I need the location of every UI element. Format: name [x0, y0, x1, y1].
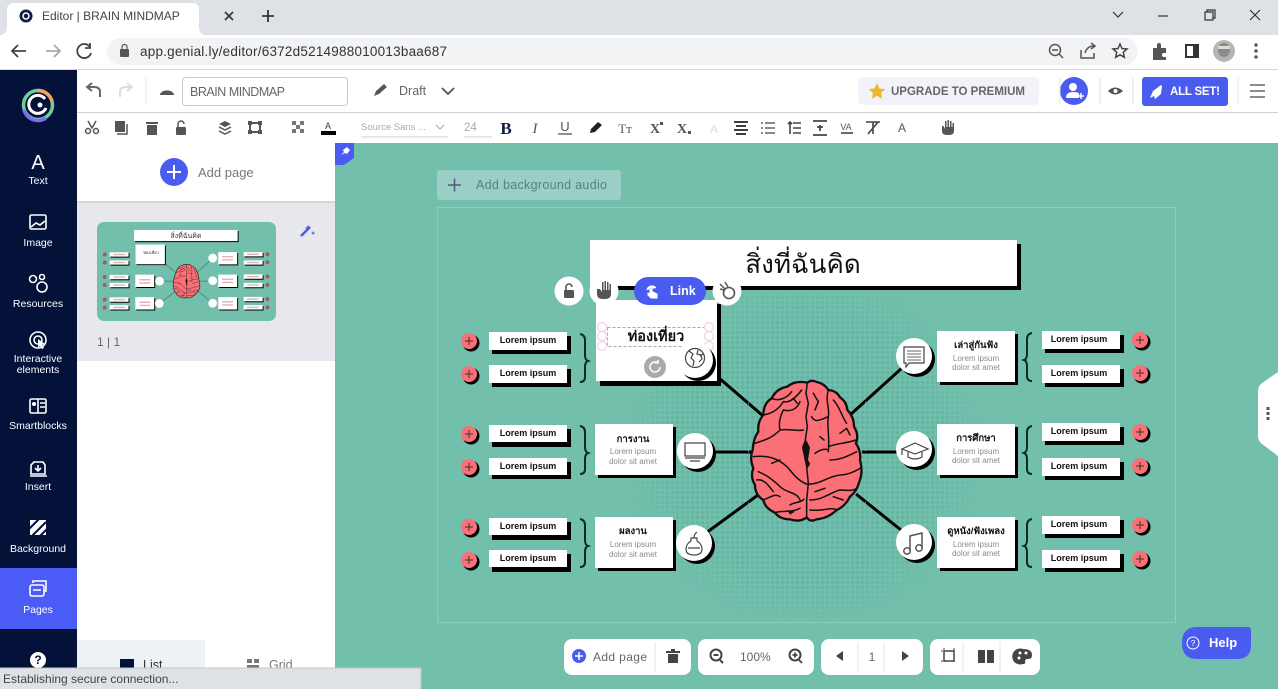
opacity icon — [292, 121, 304, 133]
lock button — [554, 276, 584, 306]
magic wand icon — [301, 225, 315, 236]
icon: speech bubble — [896, 338, 935, 377]
formatting toolbar — [77, 113, 1278, 143]
new tab button — [262, 10, 274, 22]
card: achievements: ผลงาน — [619, 526, 647, 537]
sidebar item: interactive elements: elements — [17, 364, 59, 376]
label box: Lorem ipsum — [1051, 519, 1107, 529]
label box: Lorem ipsum — [1051, 426, 1107, 436]
thumbnail of mind map: ท่องเที่ยว — [143, 250, 159, 255]
font size — [464, 122, 492, 137]
card: movies and music — [937, 517, 1018, 571]
zoom controls group: 100% — [740, 650, 771, 664]
right row 1 items — [1024, 331, 1150, 387]
sidebar item: interactive elements: Interactive — [14, 353, 62, 365]
font size: 24 — [464, 122, 477, 134]
card: work — [595, 424, 676, 478]
help icon: ? — [34, 653, 42, 667]
font selector: Source Sans ... — [361, 122, 426, 133]
title banner: สิ่งที่ฉันคิด — [745, 246, 861, 279]
pin tab — [335, 143, 354, 165]
sidebar item: text: A — [31, 152, 45, 174]
text style icons: U — [560, 119, 570, 134]
sidebar item: text — [28, 152, 48, 187]
right row 2 items — [1024, 423, 1150, 480]
text style icons: Tт — [618, 121, 632, 136]
help button: ? — [1191, 639, 1196, 648]
url field — [107, 38, 1138, 65]
bracket — [1024, 426, 1032, 474]
text colour icon — [321, 121, 336, 135]
text colour icon: A — [325, 121, 331, 131]
zoom controls group — [698, 639, 814, 675]
bracket — [580, 426, 588, 474]
link pill button: Link — [670, 284, 696, 298]
card: storytelling: Lorem ipsum — [953, 354, 999, 363]
plus button — [461, 426, 480, 444]
label box: Lorem ipsum — [500, 368, 556, 378]
menu icon — [1250, 85, 1265, 97]
add page row: Add page — [198, 165, 254, 180]
preview eye — [1108, 88, 1123, 94]
page navigation group — [821, 639, 923, 675]
formatting toolbar: VA — [840, 122, 852, 132]
plus button — [1132, 365, 1150, 384]
rotate handle — [644, 356, 666, 378]
editor header toolbar — [0, 70, 1278, 113]
icon: globe — [677, 342, 716, 381]
sidebar item: smartblocks: Smartblocks — [9, 420, 67, 432]
sidebar item: background — [10, 518, 66, 555]
add collaborator button — [1060, 77, 1088, 105]
bottom toolbar — [564, 639, 1040, 675]
brain illustration — [748, 378, 866, 524]
card: storytelling: เล่าสู่กันฟัง — [954, 339, 998, 352]
card: work: dolor sit amet — [609, 457, 658, 466]
magnet button — [712, 276, 742, 306]
page navigation group: 1 — [869, 650, 876, 664]
floating selection toolbar — [554, 276, 742, 306]
sidebar item: image: Image — [23, 237, 53, 249]
text style icons: X — [677, 122, 687, 137]
sidebar item: background: Background — [10, 543, 66, 555]
halftone background — [656, 301, 954, 599]
sidebar item: interactive elements — [14, 332, 62, 376]
view tools group — [930, 639, 1040, 675]
formatting toolbar: A — [898, 121, 906, 135]
hand tool icon — [942, 120, 954, 135]
bracket — [580, 519, 588, 567]
browser status bar: Establishing secure connection... — [3, 672, 178, 686]
card: movies and music: Lorem ipsum — [953, 540, 999, 549]
label box: Lorem ipsum — [500, 335, 556, 345]
active tab: Editor | BRAIN MINDMAP — [42, 9, 180, 23]
bracket — [1024, 333, 1032, 381]
draft status — [374, 84, 454, 98]
sidebar item: smartblocks — [9, 399, 67, 432]
page number: 1 | 1 — [97, 335, 120, 349]
browser status bar — [0, 668, 421, 689]
card: achievements: Lorem ipsum — [610, 540, 656, 549]
left row 3 items — [461, 518, 588, 572]
label box: Lorem ipsum — [500, 428, 556, 438]
plus button — [461, 333, 480, 352]
layer and group icons — [219, 121, 262, 134]
bracket — [580, 334, 588, 382]
list and grid tabs: Grid — [269, 658, 293, 672]
hand button — [590, 276, 618, 306]
card: storytelling: dolor sit amet — [952, 363, 1001, 372]
icon: music note — [896, 524, 935, 563]
label box: Lorem ipsum — [1051, 368, 1107, 378]
selected card: travel — [596, 300, 721, 386]
plus button — [1132, 424, 1150, 442]
text style icons — [500, 119, 718, 138]
card: work: Lorem ipsum — [610, 447, 656, 456]
icon: graduation cap — [896, 431, 935, 470]
sidebar item: pages active: Pages — [23, 604, 53, 616]
upgrade to premium button — [858, 77, 1039, 105]
add background audio button: Add background audio — [476, 178, 607, 192]
canvas page frame — [438, 208, 1176, 622]
text style icons: B — [500, 119, 512, 138]
right row 3 items — [1024, 516, 1150, 572]
add page row — [160, 158, 254, 186]
edit tool icons — [86, 121, 186, 135]
plus button — [461, 459, 480, 478]
bracket — [1024, 519, 1032, 567]
help button — [1182, 627, 1251, 659]
card: work: การงาน — [617, 434, 650, 445]
card: storytelling — [937, 331, 1018, 385]
sidebar item: text: Text — [28, 175, 48, 187]
left sidebar — [0, 70, 77, 689]
browser menu — [1254, 43, 1258, 59]
help icon — [30, 652, 46, 668]
upgrade to premium button: UPGRADE TO PREMIUM — [891, 86, 1025, 98]
browser address bar — [0, 35, 1278, 70]
sidebar item: insert — [25, 462, 51, 493]
text selection box: ท่องเที่ยว — [628, 325, 684, 345]
font selector — [361, 122, 448, 137]
plus button — [1132, 551, 1150, 570]
genially logo — [24, 90, 52, 120]
card: education — [937, 424, 1018, 478]
card: movies and music: ดูหนัง/ฟังเพลง — [947, 525, 1005, 538]
pages panel — [77, 143, 335, 689]
plus button — [461, 366, 480, 384]
card: achievements — [595, 517, 676, 571]
connector lines — [706, 368, 902, 533]
card: achievements: dolor sit amet — [609, 550, 658, 559]
profile avatar — [1213, 40, 1235, 62]
text style icons: I — [532, 121, 538, 137]
label box: Lorem ipsum — [500, 461, 556, 471]
page controls group: Add page — [593, 650, 647, 664]
label box: Lorem ipsum — [500, 521, 556, 531]
alignment and spacing icons — [734, 121, 880, 135]
sidebar item: insert: Insert — [25, 481, 51, 493]
card: education: Lorem ipsum — [953, 447, 999, 456]
left row 1 items — [461, 332, 588, 387]
navigation icons — [12, 43, 91, 58]
browser action icons — [1050, 43, 1127, 58]
help button: Help — [1209, 635, 1237, 650]
sidebar item: image — [23, 215, 53, 249]
thumbnail of mind map — [97, 222, 276, 321]
undo and redo — [87, 83, 132, 97]
plus button — [461, 552, 480, 570]
left row 2 items — [461, 425, 588, 479]
sidebar item: resources: Resources — [13, 298, 63, 310]
plus button — [461, 519, 480, 538]
card: movies and music: dolor sit amet — [952, 549, 1001, 558]
page controls group — [564, 639, 691, 675]
list and grid tabs: List — [143, 658, 163, 672]
label box: Lorem ipsum — [1051, 461, 1107, 471]
plus button — [1132, 332, 1150, 350]
plus button — [1132, 517, 1150, 536]
project name field — [160, 78, 348, 106]
project name field: BRAIN MINDMAP — [190, 85, 285, 99]
sidebar item: pages active — [0, 568, 77, 629]
list and grid tabs — [77, 640, 293, 689]
window controls — [1113, 10, 1260, 20]
card: education: dolor sit amet — [952, 456, 1001, 465]
browser tab bar — [0, 0, 1278, 35]
sidebar item: resources — [13, 274, 63, 310]
text style icons: X — [650, 122, 660, 137]
canvas background — [335, 143, 1278, 689]
icon: flask — [676, 525, 715, 564]
extension icons — [1153, 43, 1198, 60]
card: education: การศึกษา — [956, 432, 996, 444]
label box: Lorem ipsum — [500, 553, 556, 563]
icon: computer — [677, 433, 716, 472]
plus button — [1132, 458, 1150, 476]
label box: Lorem ipsum — [1051, 334, 1107, 344]
add background audio button — [437, 170, 621, 200]
draft status: Draft — [399, 84, 427, 98]
link pill button — [634, 277, 706, 305]
all set button: ALL SET! — [1170, 86, 1220, 98]
url field: app.genial.ly/editor/6372d5214988010013baa687 — [140, 44, 447, 59]
active tab — [0, 3, 233, 35]
title banner — [590, 240, 1021, 290]
side panel handle — [1258, 372, 1278, 456]
thumbnail of mind map: สิ่งที่ฉันคิด — [170, 231, 202, 240]
text style icons: A — [710, 122, 718, 136]
label box: Lorem ipsum — [1051, 553, 1107, 563]
page thumbnail section — [77, 201, 335, 361]
all set button — [1142, 77, 1228, 106]
